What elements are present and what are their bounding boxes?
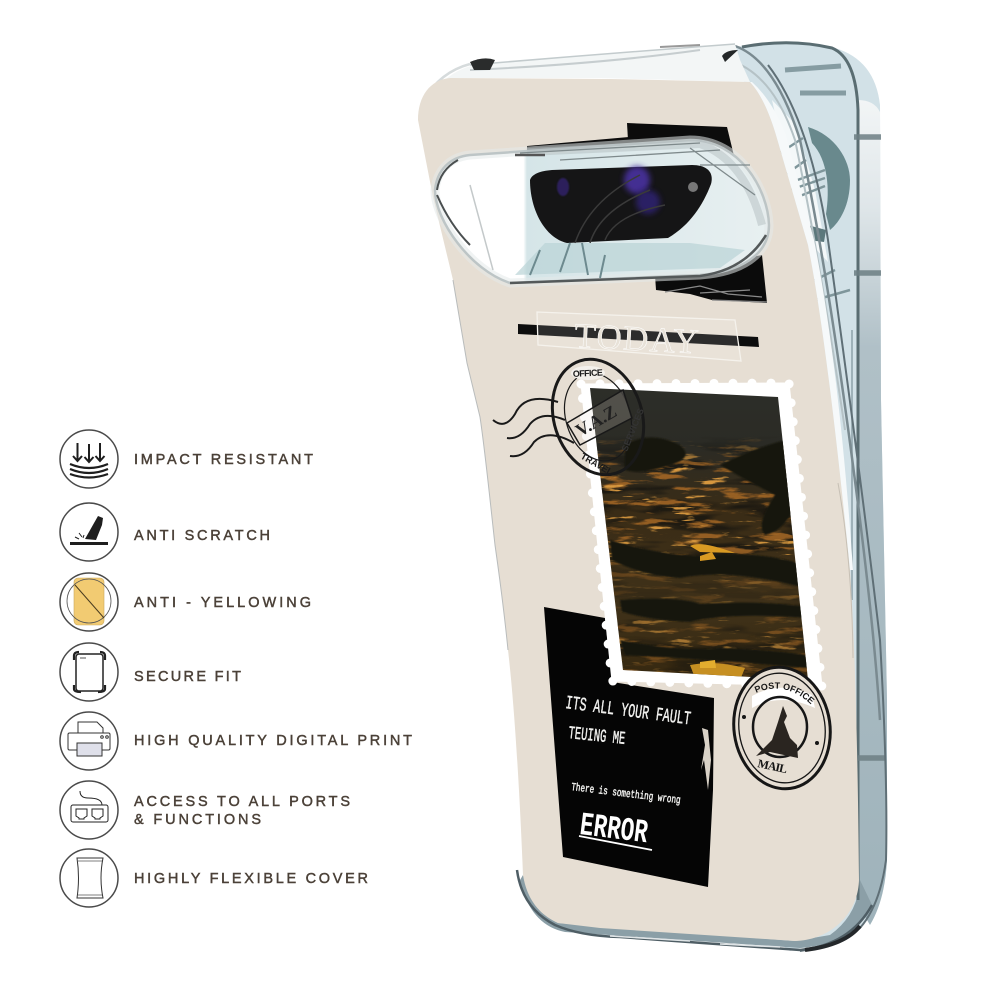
feature: impact resistant xyxy=(60,430,313,488)
today label: TODAY xyxy=(574,316,699,361)
black label behind camera xyxy=(527,123,767,303)
note text: its all your fault: ITS ALL YOUR FAULT xyxy=(564,692,692,730)
feature: impact resistant: IMPACT RESISTANT xyxy=(134,452,313,468)
office postmark xyxy=(493,347,658,487)
today label xyxy=(518,312,759,361)
black note with text xyxy=(544,607,714,887)
postmark text: post office: POST OFFICE xyxy=(754,682,815,704)
feature: high quality digital print: HIGH QUALITY DIGITAL PRINT xyxy=(134,733,412,749)
faint cover highlight line xyxy=(838,483,853,658)
postmark text: office: OFFICE xyxy=(573,367,603,379)
feature: access to all ports and functions: ACCESS TO ALL PORTS xyxy=(134,794,350,810)
product infographic xyxy=(59,41,888,952)
feature: anti yellowing xyxy=(60,573,311,631)
camera cutout xyxy=(435,140,769,283)
phone body behind cover xyxy=(520,43,887,951)
clear case rim xyxy=(424,44,886,951)
printed back cover xyxy=(418,78,859,941)
note text: error: ERROR xyxy=(578,807,650,852)
feature: access to all ports and functions xyxy=(60,781,350,839)
feature: secure fit xyxy=(60,643,241,701)
feature: secure fit: SECURE FIT xyxy=(134,669,241,685)
note text: something wrong: There is something wrong xyxy=(571,782,681,807)
feature: anti scratch xyxy=(60,503,270,561)
feature: highly flexible cover xyxy=(60,849,368,907)
postmark text: travel services: SERVICES xyxy=(620,407,646,453)
feature: high quality digital print xyxy=(60,712,412,770)
feature: anti yellowing: ANTI - YELLOWING xyxy=(134,595,311,611)
postmark text: mail: MAIL xyxy=(756,756,789,776)
white sliver beside cover xyxy=(750,82,853,570)
cover left edge shadow xyxy=(453,280,508,650)
phone in clear case xyxy=(418,41,888,952)
note text: teuing me: TEUING ME xyxy=(567,724,626,750)
post office mail postmark xyxy=(732,666,832,790)
postmark text: v.a.z: V.A.Z xyxy=(572,401,620,440)
feature: anti scratch: ANTI SCRATCH xyxy=(134,528,270,544)
feature: access to all ports and functions: & FUNCTIONS xyxy=(134,812,261,828)
feature icons and labels xyxy=(60,430,412,907)
postmark text: travel services xyxy=(579,407,646,478)
postage stamp photo xyxy=(581,383,822,686)
postmark text: travel services: TRAVEL xyxy=(579,451,615,478)
feature: highly flexible cover: HIGHLY FLEXIBLE COVER xyxy=(134,871,368,887)
